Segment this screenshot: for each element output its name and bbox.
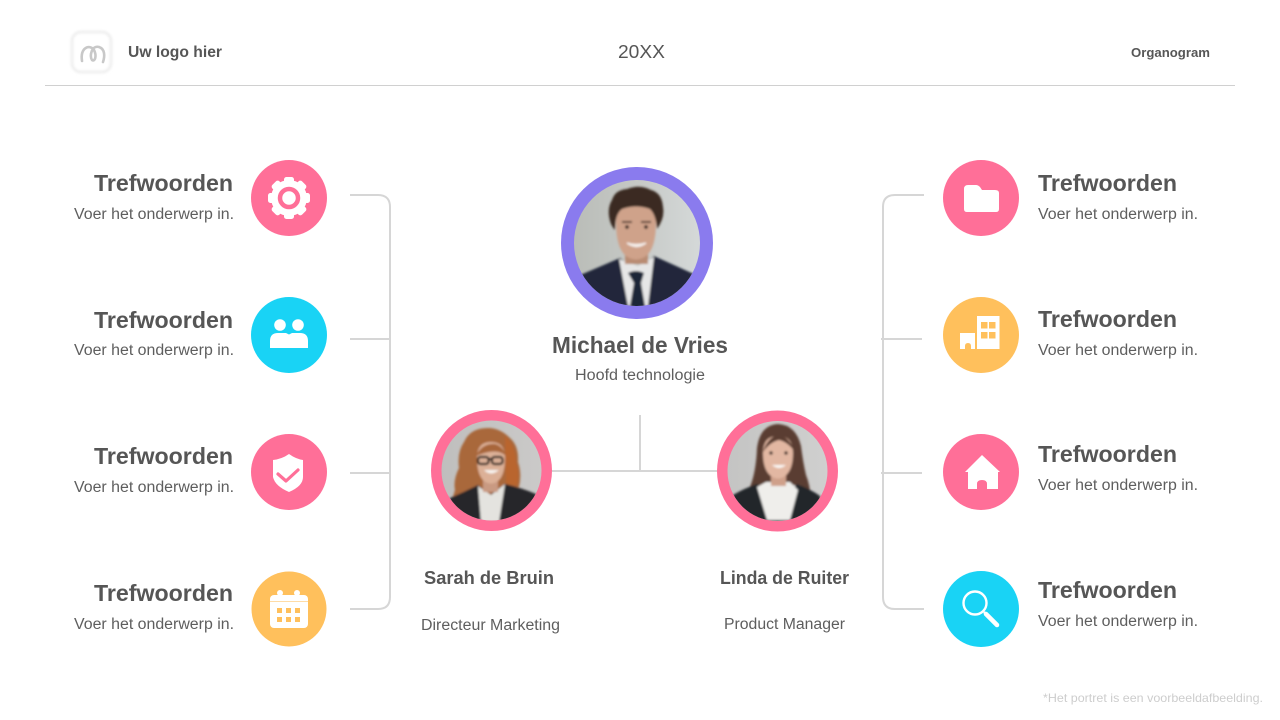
text: description: Voer het onderwerp in. [1038,613,1198,630]
icon: folder [943,160,1019,236]
year: 20XX [618,41,665,62]
left connector bracket [350,195,390,609]
portrait: Linda de Ruiter [717,410,838,532]
portrait: Michael de Vries [561,167,713,320]
text: keyword: Trefwoorden [1038,577,1177,603]
role: Product Manager: Product Manager [724,616,845,633]
text: keyword: Trefwoorden [1038,306,1177,332]
icon: house [943,434,1019,510]
text: description: Voer het onderwerp in. [74,342,234,359]
left item 2 [74,297,327,373]
name: Michael de Vries: Michael de Vries [552,332,728,358]
role: Directeur Marketing: Directeur Marketing [421,617,560,634]
icon: magnifier [943,571,1019,647]
text: keyword: Trefwoorden [1038,170,1177,196]
text: keyword: Trefwoorden [1038,441,1177,467]
center connector [552,415,717,472]
icon: calendar [252,572,326,646]
text: description: Voer het onderwerp in. [74,479,234,496]
logo text: Uw logo hier [128,44,222,61]
text: description: Voer het onderwerp in. [1038,342,1198,359]
right connector bracket [881,195,924,609]
text: description: Voer het onderwerp in. [74,616,234,633]
icon: buildings [943,297,1019,373]
footnote: *Het portret is een voorbeeldafbeelding. [1043,691,1263,705]
icon: gear [251,160,327,236]
text: keyword: Trefwoorden [94,580,233,606]
icon: shield check [251,434,327,510]
left item 1 [74,160,327,236]
text: keyword: Trefwoorden [94,170,233,196]
portrait: Sarah de Bruin [431,410,552,531]
right item 2 [943,297,1198,373]
role: Hoofd technologie: Hoofd technologie [575,367,705,384]
page title: Organogram [1131,45,1210,60]
left item 3 [74,434,327,510]
icon: logo [72,32,111,72]
name: Linda de Ruiter: Linda de Ruiter [720,567,849,588]
name: Sarah de Bruin: Sarah de Bruin [424,567,554,588]
left item 4 [74,572,326,646]
text: description: Voer het onderwerp in. [1038,477,1198,494]
right item 1 [943,160,1198,236]
text: keyword: Trefwoorden [94,443,233,469]
right item 3 [943,434,1198,510]
header [72,32,1210,72]
icon: people [251,297,327,373]
text: keyword: Trefwoorden [94,307,233,333]
text: description: Voer het onderwerp in. [1038,206,1198,223]
text: description: Voer het onderwerp in. [74,206,234,223]
right item 4 [943,571,1198,647]
